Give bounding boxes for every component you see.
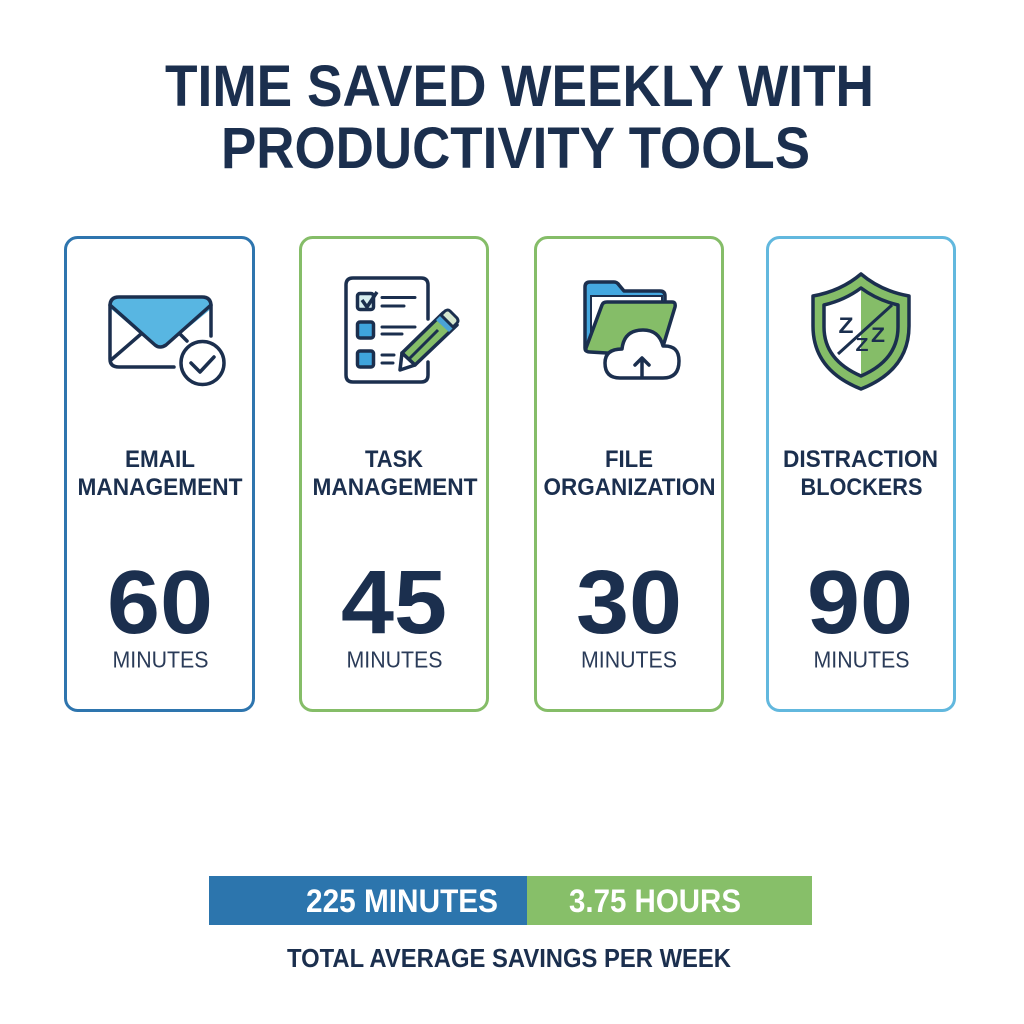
icon: folder with cloud upload [585, 282, 679, 378]
title: TIME SAVED WEEKLY WITH [165, 54, 874, 119]
panel: file organization [536, 238, 722, 710]
bar segment: minutes: 225 MINUTES [306, 883, 498, 919]
total caption: TOTAL AVERAGE SAVINGS PER WEEK [287, 943, 731, 973]
icon: envelope with check [110, 297, 224, 384]
bar segment: minutes [209, 876, 527, 925]
value: 30 [576, 553, 682, 653]
label: MANAGEMENT [312, 474, 478, 501]
label: BLOCKERS [800, 474, 922, 501]
icon: shield with z's: Z [838, 313, 854, 338]
bar segment: hours [527, 876, 812, 925]
icon: shield with z's: Z [856, 335, 868, 355]
unit: MINUTES [814, 646, 910, 672]
icon: shield with z's [813, 274, 909, 389]
label [783, 446, 938, 501]
bar segment: hours: 3.75 HOURS [569, 883, 741, 919]
title [165, 54, 874, 181]
unit: MINUTES [581, 646, 677, 672]
value: 45 [341, 553, 447, 653]
icon: shield with z's: Z [871, 324, 885, 347]
label [78, 446, 243, 501]
panel: distraction blockers [768, 238, 954, 710]
unit: MINUTES [112, 646, 208, 672]
label: DISTRACTION [783, 446, 938, 473]
label: TASK [365, 446, 423, 473]
panel: task management [300, 238, 488, 710]
value: 90 [807, 553, 913, 653]
icon: checklist with pencil [346, 278, 458, 382]
total bar [209, 876, 812, 925]
label: ORGANIZATION [544, 474, 716, 501]
panel: email management [66, 238, 254, 710]
label [312, 446, 478, 501]
value: 60 [107, 553, 213, 653]
label: EMAIL [125, 446, 195, 473]
label: MANAGEMENT [78, 474, 243, 501]
label [544, 446, 716, 501]
title: PRODUCTIVITY TOOLS [221, 116, 810, 181]
unit: MINUTES [346, 646, 442, 672]
label: FILE [605, 446, 653, 473]
